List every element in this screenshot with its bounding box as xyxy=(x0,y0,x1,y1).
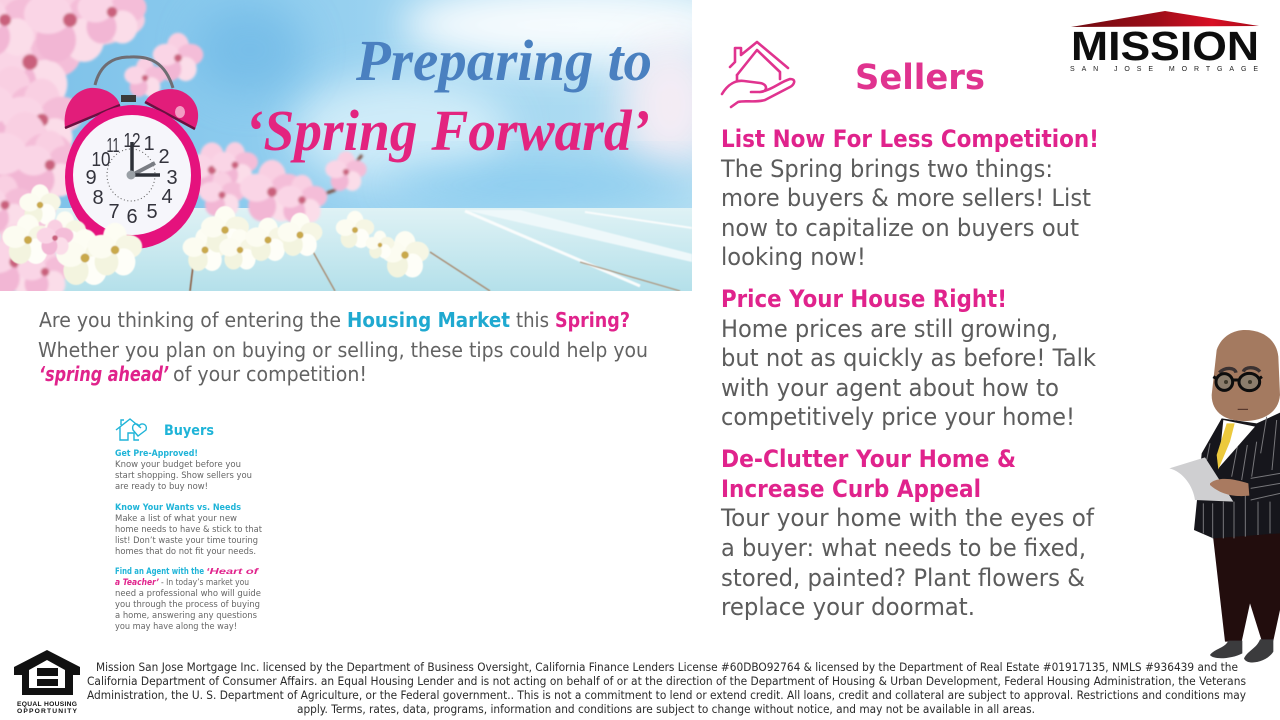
sky background xyxy=(58,0,692,208)
tip: list now: now to capitalize on buyers out xyxy=(721,214,1079,242)
icon: house with heart xyxy=(116,419,146,440)
tip: list now: The Spring brings two things: xyxy=(720,155,1053,183)
tip: find an agent: ‘Heart of xyxy=(206,566,260,576)
clock numerals: 4 xyxy=(161,186,173,208)
tip: find an agent: - In today’s market you xyxy=(161,578,249,588)
tip: de-clutter: stored, painted? Plant flowers & xyxy=(721,564,1085,592)
glasses xyxy=(1213,373,1262,391)
clock numerals: 5 xyxy=(146,201,158,223)
intro text: of your competition! xyxy=(173,362,367,386)
tip: price right xyxy=(721,285,1096,431)
tip: wants vs needs: list! Don’t waste your time touring xyxy=(115,536,258,546)
logo: Mission San Jose Mortgage: SAN JOSE MORTGAGE xyxy=(1070,66,1258,73)
tip: get pre-approved xyxy=(115,449,252,492)
tip: find an agent: a home, answering any questions xyxy=(115,611,257,621)
tip: wants vs needs xyxy=(115,503,262,557)
tip: price right: Home prices are still growing, xyxy=(721,315,1058,343)
intro text xyxy=(38,308,648,386)
logo: Mission San Jose Mortgage: MISSION xyxy=(1071,23,1259,69)
clock numerals: 12 xyxy=(124,130,140,152)
tip: wants vs needs: homes that do not fit your needs. xyxy=(115,547,256,557)
tip: de-clutter: replace your doormat. xyxy=(721,593,975,621)
pinstripes xyxy=(1203,417,1280,538)
footer disclaimer xyxy=(87,660,1246,716)
tip: list now xyxy=(720,125,1099,271)
tip: find an agent: a Teacher’ xyxy=(115,578,159,588)
shirt xyxy=(1218,420,1255,468)
tip: wants vs needs: Make a list of what your new xyxy=(115,514,237,524)
title xyxy=(251,40,650,162)
tip: get pre-approved: Know your budget before you xyxy=(115,460,241,470)
head xyxy=(1212,330,1280,421)
logo: Mission San Jose Mortgage xyxy=(1070,11,1259,73)
jacket xyxy=(1194,413,1280,538)
cherry blossoms xyxy=(0,0,367,297)
heading: buyers: Buyers xyxy=(164,423,214,439)
clock numerals: 11 xyxy=(106,135,120,157)
alarm clock xyxy=(65,57,201,249)
tip: list now: List Now For Less Competition! xyxy=(721,125,1099,153)
intro text: this xyxy=(516,308,549,332)
tip: get pre-approved: are ready to buy now! xyxy=(115,482,208,492)
tip: get pre-approved: Get Pre-Approved! xyxy=(115,449,198,459)
tip: find an agent: you may have along the way! xyxy=(115,622,237,632)
tip: de-clutter: a buyer: what needs to be fixed, xyxy=(721,534,1086,562)
tip: de-clutter: Tour your home with the eyes of xyxy=(720,504,1095,532)
tip: wants vs needs: Know Your Wants vs. Needs xyxy=(115,503,241,513)
logo: equal housing opportunity: EQUAL HOUSING xyxy=(17,701,77,708)
icon: house on a hand xyxy=(722,42,794,107)
heading: sellers: Sellers xyxy=(855,58,985,98)
tip: wants vs needs: home needs to have & stick to that xyxy=(115,525,262,535)
title: Preparing to xyxy=(355,28,652,93)
tip: price right: with your agent about how to xyxy=(721,374,1059,402)
clock numerals: 3 xyxy=(166,167,178,189)
white blossoms xyxy=(2,184,429,285)
title: ‘Spring Forward’ xyxy=(245,98,650,163)
paper xyxy=(1169,457,1233,502)
panel: sellers xyxy=(720,42,1099,621)
hero banner: spring alarm clock photo with title xyxy=(0,0,740,297)
mouth xyxy=(1238,408,1248,411)
intro text: Spring? xyxy=(555,308,630,332)
clock numerals: 1 xyxy=(143,133,155,155)
tip: price right: but not as quickly as before! Talk xyxy=(721,344,1096,372)
intro text: Housing Market xyxy=(347,308,510,332)
clock numerals: 10 xyxy=(92,149,110,171)
tip: find an agent xyxy=(115,566,261,632)
tie xyxy=(1217,423,1235,469)
panel: buyers xyxy=(115,419,262,632)
logo: equal housing opportunity: OPPORTUNITY xyxy=(17,708,78,715)
tip: de-clutter: De-Clutter Your Home & xyxy=(721,445,1016,473)
tip: price right: Price Your House Right! xyxy=(721,285,1007,313)
logo: equal housing opportunity xyxy=(14,650,80,715)
character: man in pinstripe suit reading paper xyxy=(1169,330,1280,662)
clock numerals: 9 xyxy=(85,167,97,189)
pants xyxy=(1213,530,1280,642)
tip: get pre-approved: start shopping. Show sellers you xyxy=(115,471,252,481)
clock numerals: 2 xyxy=(158,146,170,168)
clock numerals xyxy=(85,130,178,228)
tip: find an agent: need a professional who will guide xyxy=(115,589,261,599)
intro text: ‘spring ahead’ xyxy=(39,362,169,386)
hand xyxy=(1210,479,1249,496)
clock numerals: 7 xyxy=(108,201,120,223)
tip: find an agent: Find an Agent with the xyxy=(115,567,204,577)
clock numerals: 8 xyxy=(92,187,104,209)
intro text: Are you thinking of entering the xyxy=(39,308,341,332)
tip: find an agent: you through the process of buying xyxy=(115,600,260,610)
tip: de-clutter xyxy=(720,445,1095,621)
shoes xyxy=(1210,641,1242,658)
tip: de-clutter: Increase Curb Appeal xyxy=(721,475,981,503)
footer disclaimer: apply. Terms, rates, data, programs, information and conditions are subject to change without notice, and may not be available in all areas. xyxy=(297,702,1035,716)
intro text: Whether you plan on buying or selling, these tips could help you xyxy=(38,338,648,362)
wooden table xyxy=(0,208,692,291)
tip: price right: competitively price your home! xyxy=(721,403,1075,431)
tip: list now: more buyers & more sellers! List xyxy=(721,184,1091,212)
clock numerals: 6 xyxy=(126,206,138,228)
eyebrows xyxy=(1219,368,1260,373)
tip: list now: looking now! xyxy=(721,243,866,271)
